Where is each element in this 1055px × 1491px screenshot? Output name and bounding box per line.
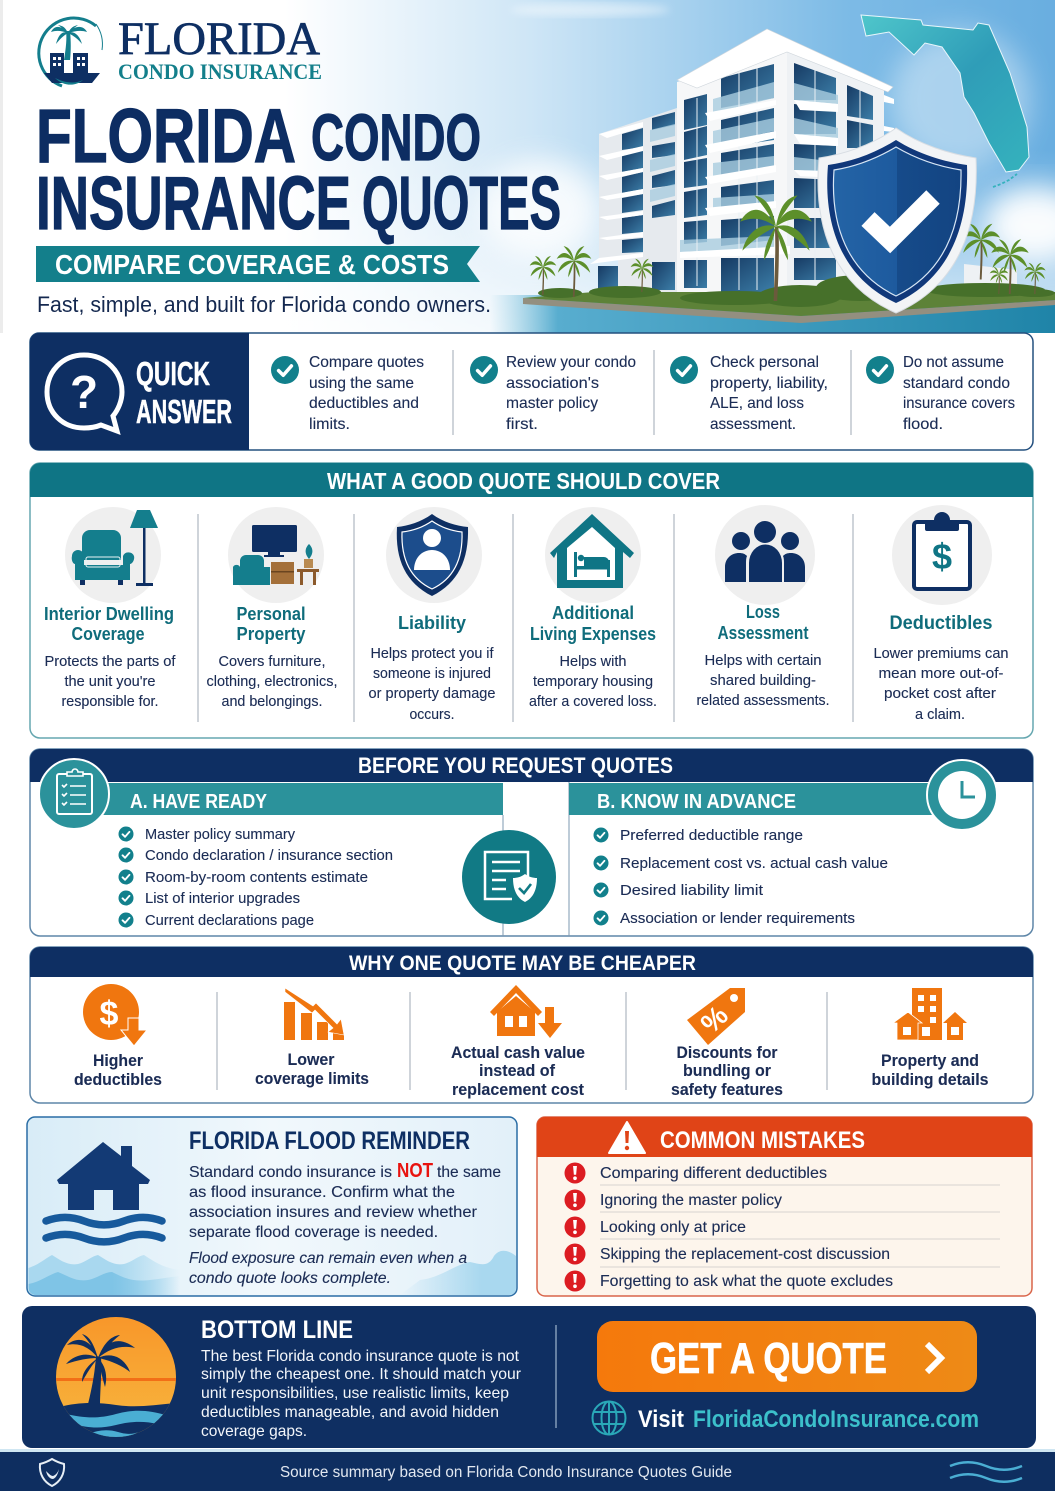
panel: what a good quote should cover (30, 463, 1033, 738)
panel: common mistakes (537, 1117, 1032, 1296)
checklist items: Desired liability limit (620, 882, 764, 899)
footer (0, 1449, 1055, 1491)
checklist items: Master policy summary (145, 826, 295, 843)
checklist items (118, 826, 393, 929)
item: additional living expenses: after a covered loss. (529, 694, 657, 710)
item: deductibles (874, 505, 1008, 723)
item: flood not covered: insurance covers (903, 395, 1015, 412)
item: liability: Helps protect you if (370, 646, 494, 662)
body text: NOT (397, 1160, 433, 1182)
checklist items: Preferred deductible range (620, 827, 803, 844)
panel: Florida flood reminder (27, 1117, 517, 1296)
item: deductibles: mean more out-of- (878, 666, 1004, 682)
item: discounts: Discounts for (676, 1043, 778, 1062)
item: discounts (671, 988, 783, 1099)
item: higher deductibles (74, 984, 162, 1089)
heading: WHY ONE QUOTE MAY BE CHEAPER (349, 952, 696, 975)
title: INSURANCE (36, 161, 351, 245)
checklist items (594, 827, 888, 927)
item: check personal property: property, liability, (710, 375, 828, 392)
item: loss assessment: Loss (746, 602, 780, 622)
icon: clipboard with dollar: $ (932, 536, 952, 577)
icon: person shield (397, 514, 468, 596)
logo wordmark: FLORIDA (118, 13, 320, 65)
logo wordmark: CONDO INSURANCE (118, 59, 322, 84)
item: discounts: bundling or (683, 1061, 771, 1080)
heading: BEFORE YOU REQUEST QUOTES (358, 753, 673, 778)
tagline: Fast, simple, and built for Florida condo owners. (37, 292, 491, 317)
item: interior dwelling coverage: the unit you're (64, 674, 156, 690)
subtitle ribbon: COMPARE COVERAGE & COSTS (55, 249, 449, 280)
item: compare quotes: deductibles and (309, 395, 419, 412)
item: flood not covered (866, 354, 1015, 433)
item: flood not covered: Do not assume (903, 354, 1004, 371)
item: lower coverage limits (255, 988, 369, 1088)
mistake list: Forgetting to ask what the quote excludes (600, 1273, 893, 1290)
title (36, 94, 561, 245)
item: higher deductibles: Higher (93, 1051, 143, 1070)
icon: house and arrow (490, 985, 562, 1038)
item: compare quotes (271, 354, 424, 433)
icon: price tag: % (695, 1000, 734, 1039)
item: compare quotes: using the same (309, 375, 414, 392)
icon: sunset palm (56, 1317, 176, 1440)
item: review master policy: association's (506, 375, 599, 392)
item: deductibles: a claim. (915, 707, 965, 723)
mistake list: Comparing different deductibles (600, 1165, 827, 1182)
column A: have ready: A. HAVE READY (130, 791, 268, 813)
item: interior dwelling coverage: Protects the parts of (44, 654, 176, 670)
panel: bottom line (22, 1306, 1036, 1448)
item: liability (368, 507, 496, 723)
item: check personal property (670, 354, 828, 433)
column A: have ready (39, 759, 503, 929)
item: liability: someone is injured (373, 666, 491, 682)
item: lower coverage limits: coverage limits (255, 1069, 369, 1088)
illustration: condo building on island (523, 29, 1055, 323)
italic note: condo quote looks complete. (189, 1270, 391, 1287)
wing (599, 108, 677, 292)
item: actual cash value: replacement cost (452, 1080, 584, 1099)
item: property details (872, 988, 988, 1089)
panel: before you request quotes (30, 749, 1033, 936)
heading: FLORIDA FLOOD REMINDER (189, 1127, 470, 1155)
item: personal property: clothing, electronics, (206, 674, 338, 690)
item: interior dwelling coverage: Interior Dwelling (44, 604, 174, 624)
mistake list: Looking only at price (600, 1219, 746, 1236)
item: additional living expenses: Living Expenses (530, 624, 656, 644)
illustration: shield with check (818, 128, 976, 313)
mistake list: Ignoring the master policy (600, 1192, 782, 1209)
item: interior dwelling coverage: responsible for. (62, 694, 158, 710)
column B: know in advance: B. KNOW IN ADVANCE (597, 791, 796, 813)
logo (39, 13, 322, 86)
item: compare quotes: limits. (309, 416, 350, 433)
body text: simply the cheapest one. It should match your (201, 1366, 522, 1383)
item: personal property: and belongings. (222, 694, 322, 710)
icon: armchair and lamp (72, 510, 158, 586)
mistake list: Skipping the replacement-cost discussion (600, 1246, 890, 1263)
item: actual cash value (451, 985, 585, 1099)
icon: house with bed (550, 514, 634, 588)
item: check personal property: assessment. (710, 416, 796, 433)
water decoration (28, 1251, 516, 1295)
checklist items: List of interior upgrades (145, 890, 300, 907)
heading (136, 355, 232, 430)
item: personal property: Covers furniture, (218, 654, 326, 670)
italic note: Flood exposure can remain even when a (189, 1250, 467, 1267)
mistake list (564, 1162, 893, 1292)
body text: association insures and review whether (189, 1204, 478, 1221)
item: flood not covered: standard condo (903, 375, 1010, 392)
checklist items: Current declarations page (145, 912, 314, 929)
roof (677, 29, 893, 92)
item: additional living expenses: Helps with (560, 654, 626, 670)
italic note (189, 1250, 467, 1287)
icon: buildings (893, 988, 967, 1040)
website link: FloridaCondoInsurance.com (693, 1406, 979, 1433)
item: higher deductibles: deductibles (74, 1070, 162, 1089)
heading: COMMON MISTAKES (660, 1127, 865, 1154)
hero background (0, 0, 1055, 333)
illustration: Florida map (861, 15, 1029, 187)
heading: BOTTOM LINE (201, 1316, 353, 1344)
checklist items: Room-by-room contents estimate (145, 869, 368, 886)
icon: checklist (39, 759, 109, 829)
body text: The best Florida condo insurance quote is not (201, 1348, 520, 1365)
checklist items: Association or lender requirements (620, 910, 855, 927)
title: FLORIDA (36, 94, 296, 179)
panel: quick answer (30, 333, 1033, 450)
item: loss assessment: shared building- (710, 673, 816, 689)
item: personal property: Personal (236, 604, 306, 624)
item: liability: occurs. (410, 707, 454, 723)
item: discounts: safety features (671, 1080, 783, 1099)
item: liability: Liability (398, 613, 466, 633)
right face (787, 50, 884, 292)
item: check personal property: ALE, and loss (710, 395, 804, 412)
item: actual cash value: Actual cash value (451, 1043, 585, 1062)
item: loss assessment: Helps with certain (704, 653, 822, 669)
body text: separate flood coverage is needed. (189, 1224, 438, 1241)
item: actual cash value: instead of (479, 1061, 555, 1080)
island (523, 298, 1055, 323)
icon: clock (927, 760, 997, 830)
item: loss assessment: related assessments. (696, 693, 830, 709)
column B: know in advance (569, 760, 997, 927)
icon: dollar down: $ (100, 995, 119, 1033)
website link (592, 1402, 979, 1434)
item: additional living expenses: temporary housing (533, 674, 653, 690)
icon: falling bars (284, 988, 344, 1040)
icon: furniture (233, 525, 319, 585)
body text: Standard condo insurance is (189, 1164, 392, 1181)
button: get a quote: GET A QUOTE (650, 1334, 887, 1383)
shrubs (538, 275, 1055, 307)
centre face (677, 50, 787, 292)
item: personal property (206, 507, 338, 710)
item: review master policy: first. (506, 416, 538, 433)
icon: footer shield (40, 1459, 64, 1486)
icon: question bubble: ? (70, 366, 98, 418)
icon: warning triangle (609, 1122, 645, 1153)
body text: the same (437, 1164, 501, 1181)
icon: document with shield (462, 830, 556, 924)
body text (189, 1160, 501, 1241)
item: compare quotes: Compare quotes (309, 354, 424, 371)
panel: why one quote may be cheaper (30, 947, 1033, 1103)
item: liability: or property damage (368, 686, 496, 702)
icon: question bubble (47, 355, 122, 431)
item: additional living expenses (529, 507, 657, 710)
checklist items: Replacement cost vs. actual cash value (620, 855, 888, 872)
title: CONDO (311, 100, 481, 174)
item: property details: building details (872, 1070, 988, 1089)
checklist items: Condo declaration / insurance section (145, 847, 393, 864)
body text: unit responsibilities, use realistic limits, keep (201, 1385, 509, 1402)
item: loss assessment: Assessment (718, 623, 809, 643)
body text: as flood insurance. Confirm what the (189, 1184, 455, 1201)
body text (201, 1348, 522, 1440)
item: property details: Property and (881, 1051, 979, 1070)
palm trees (530, 195, 1046, 301)
item: deductibles: Deductibles (890, 613, 992, 634)
item: personal property: Property (236, 624, 306, 644)
item: interior dwelling coverage: Coverage (72, 624, 144, 644)
body text: deductibles manageable, and avoid hidden (201, 1404, 499, 1421)
icon: clipboard with dollar (914, 512, 970, 589)
body text: coverage gaps. (201, 1423, 307, 1440)
button: get a quote (597, 1321, 977, 1392)
heading: QUICK (136, 355, 210, 392)
source note: Source summary based on Florida Condo Insurance Quotes Guide (280, 1464, 732, 1481)
heading: WHAT A GOOD QUOTE SHOULD COVER (327, 468, 720, 494)
right annex (964, 264, 1017, 292)
item: review master policy: Review your condo (506, 354, 636, 371)
item: review master policy: master policy (506, 395, 598, 412)
icon: people (725, 521, 805, 582)
website link: Visit (638, 1406, 684, 1433)
item: check personal property: Check personal (710, 354, 819, 371)
item: lower coverage limits: Lower (288, 1050, 335, 1069)
item: review master policy (470, 354, 636, 433)
title: QUOTES (362, 161, 561, 245)
icon: footer waves (950, 1462, 1022, 1482)
item: additional living expenses: Additional (552, 603, 634, 623)
item: flood not covered: flood. (903, 416, 943, 433)
item: loss assessment (696, 505, 830, 709)
heading: ANSWER (136, 393, 232, 430)
item: interior dwelling coverage (44, 507, 176, 710)
item: deductibles: Lower premiums can (874, 646, 1008, 662)
icon: flooded house (46, 1142, 162, 1242)
item: deductibles: pocket cost after (884, 686, 996, 702)
